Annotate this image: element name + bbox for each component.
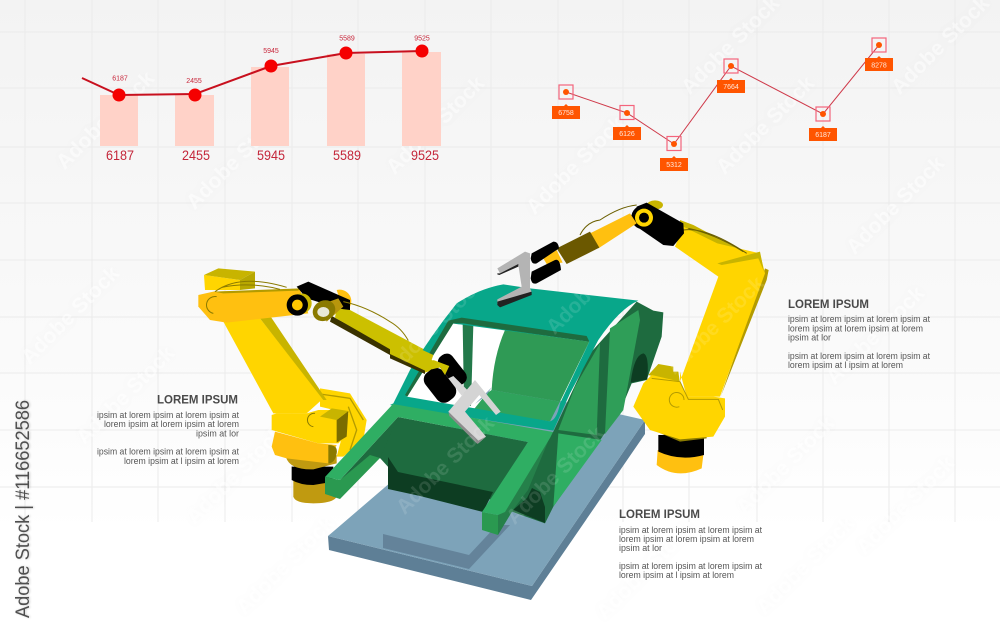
upper arm [680, 220, 747, 262]
side panels [558, 343, 600, 435]
base [657, 450, 704, 473]
rear shoulder housing [320, 388, 367, 457]
label tags [552, 104, 580, 119]
axis values [106, 147, 439, 163]
overlay watermarks: Adobe Stock [542, 232, 649, 339]
window opening [407, 322, 505, 408]
watermarks: Adobe Stock [852, 452, 959, 559]
text block: right: ipsim at lor [788, 332, 831, 342]
black clamps [531, 242, 559, 264]
data points [112, 44, 428, 102]
axis values: 5589 [333, 147, 361, 163]
window pillar [463, 323, 473, 406]
text block: left: ipsim at lorem ipsim at lorem ipsim at [97, 446, 239, 456]
overlay watermarks: Adobe Stock [382, 272, 489, 379]
text block: left: ipsim at lor [196, 428, 239, 438]
cables [683, 228, 747, 253]
text block: left: LOREM IPSUM [157, 392, 238, 406]
text block: right: lorem ipsim at l ipsim at lorem [788, 360, 903, 370]
point labels: 6187 [112, 76, 128, 82]
point labels: 5945 [263, 48, 279, 55]
tag values: 6126 [619, 131, 635, 138]
wedge behind shoulder [648, 364, 680, 383]
text block: right: ipsim at lorem ipsim at lorem ipsim at [788, 351, 930, 361]
shoulder [272, 410, 348, 443]
forearm [330, 316, 425, 373]
axis values: 5945 [257, 147, 285, 163]
car cabin [390, 284, 663, 523]
car body [325, 284, 663, 535]
shoulder [633, 375, 725, 439]
text block: bottom [619, 507, 762, 580]
stock id label: Adobe Stock | #116652586 [13, 400, 34, 618]
point labels: 5589 [339, 36, 355, 42]
tag values: 6758 [558, 110, 574, 117]
text block: left: lorem ipsim at lorem ipsim at lorem [104, 419, 239, 429]
elbow [337, 290, 351, 307]
point labels: 2455 [186, 78, 202, 85]
forearm [590, 213, 637, 248]
text block: right [788, 297, 930, 370]
tag values: 5312 [666, 162, 682, 169]
wings and cowl [325, 404, 553, 515]
watermarks: Adobe Stock [382, 72, 489, 179]
watermarks: Adobe Stock [72, 342, 179, 449]
bars [100, 52, 441, 146]
point labels: 9525 [414, 36, 430, 42]
watermarks: Adobe Stock [592, 517, 699, 624]
trend line [82, 51, 422, 95]
platform [328, 385, 645, 600]
line [566, 45, 879, 144]
text block: right: LOREM IPSUM [788, 297, 869, 311]
text block: bottom: ipsim at lorem ipsim at lorem ipsim at [619, 561, 762, 571]
text block: left: lorem ipsim at l ipsim at lorem [124, 456, 239, 466]
overlay watermarks: Adobe Stock [662, 272, 769, 379]
bar chart with line [82, 36, 441, 163]
text block: bottom: lorem ipsim at lorem ipsim at lorem [619, 534, 754, 544]
base [293, 480, 337, 503]
vertical arm [223, 318, 323, 413]
point labels [112, 36, 430, 85]
tag values: 6187 [815, 132, 831, 139]
left robot arm [198, 268, 432, 503]
watermarks: Adobe Stock [732, 412, 839, 519]
front bay [340, 417, 398, 480]
axis values: 6187 [106, 147, 134, 163]
rear body [490, 302, 663, 523]
interior wall [492, 330, 589, 402]
line chart [552, 38, 893, 171]
axis values: 9525 [411, 147, 439, 163]
text block: right: lorem ipsim at lorem ipsim at lorem [788, 324, 923, 334]
overlay watermarks [382, 232, 769, 529]
grey gripper [497, 252, 532, 304]
platform recess [383, 525, 510, 569]
watermarks: Adobe Stock [712, 72, 819, 179]
text block: left: ipsim at lorem ipsim at lorem ipsim at [97, 410, 239, 420]
overlay watermarks: Adobe Stock [392, 412, 499, 519]
tag values: 7664 [723, 84, 739, 91]
watermarks: Adobe Stock [17, 262, 124, 369]
watermarks: Adobe Stock [182, 107, 289, 214]
left gripper [390, 335, 501, 444]
text block: bottom: ipsim at lorem ipsim at lorem ipsim at [619, 525, 762, 535]
tag values [558, 62, 887, 169]
watermarks: Adobe Stock [842, 152, 949, 259]
text block: left [97, 392, 239, 466]
elbow [647, 200, 663, 210]
overlay watermarks: Adobe Stock [502, 422, 609, 529]
black clamp [435, 351, 470, 389]
watermarks: Adobe Stock [232, 512, 339, 619]
forearm tip [390, 335, 449, 375]
roof and pillars [390, 284, 638, 431]
watermarks: Adobe Stock [522, 112, 629, 219]
text block: bottom: ipsim at lor [619, 543, 662, 553]
cube [204, 268, 255, 290]
watermarks: Adobe Stock [52, 67, 159, 174]
text block: right: ipsim at lorem ipsim at lorem ipsim at [788, 314, 930, 324]
upper link [198, 289, 308, 323]
text block: bottom: lorem ipsim at l ipsim at lorem [619, 570, 734, 580]
right robot arm [497, 200, 769, 473]
watermarks: Adobe Stock [822, 282, 929, 389]
markers [559, 38, 886, 150]
watermarks: Adobe Stock [752, 512, 859, 619]
axis values: 2455 [182, 147, 210, 163]
grey gripper [448, 376, 467, 396]
watermarks: Adobe Stock [182, 422, 289, 529]
tag values: 8278 [871, 62, 887, 70]
text block: bottom: LOREM IPSUM [619, 507, 700, 521]
rear wheel arch [631, 353, 648, 383]
